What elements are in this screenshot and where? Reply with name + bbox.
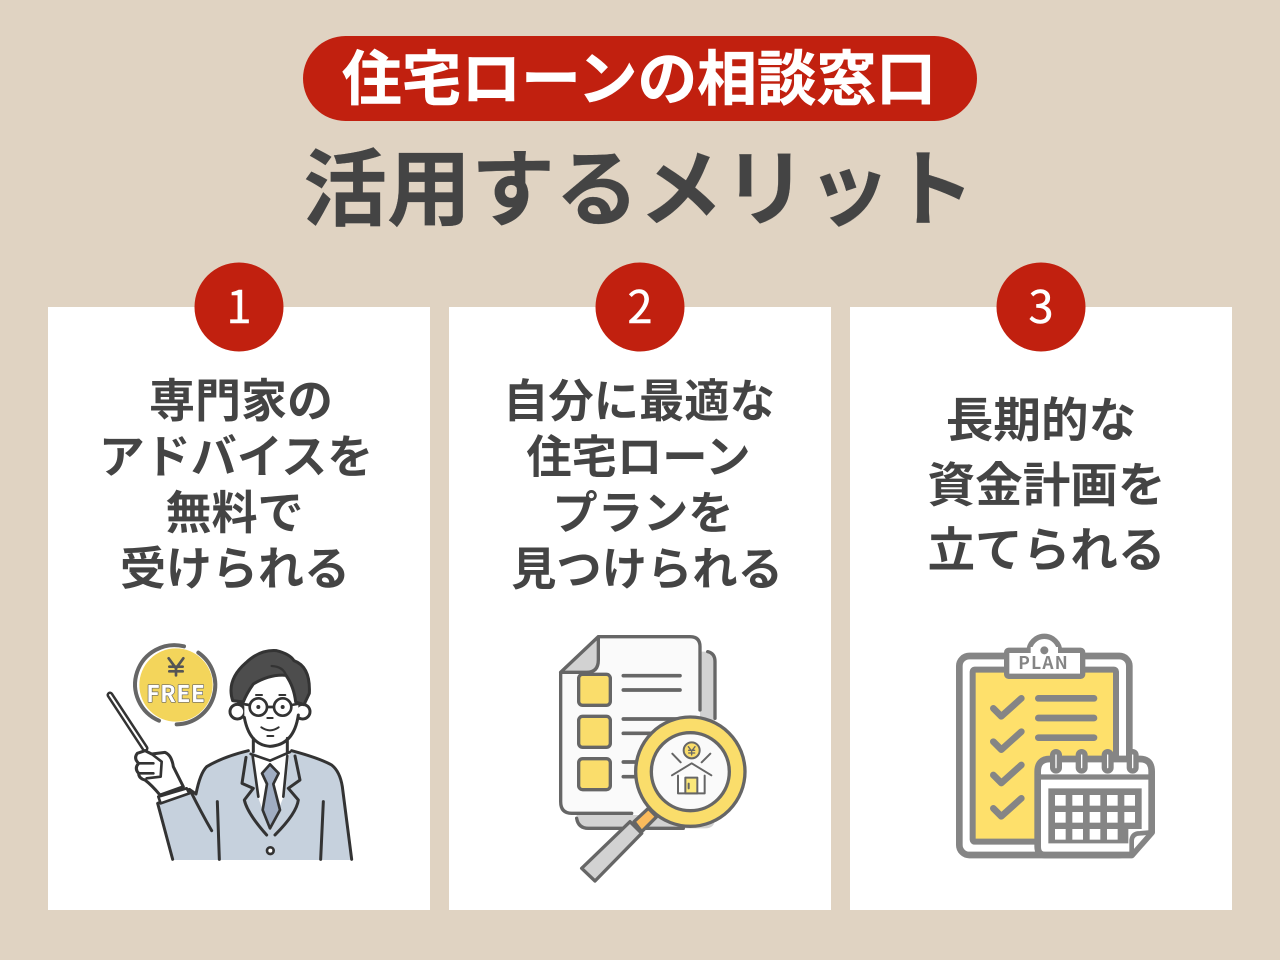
number badge 1 xyxy=(194,262,284,352)
clip with PLAN label xyxy=(1007,636,1083,676)
hand xyxy=(136,751,189,803)
calendar grid cells xyxy=(1055,795,1135,840)
subtitle heading: 活用するメリット xyxy=(303,143,975,237)
text: merit 3 xyxy=(928,395,1165,578)
checklist boxes xyxy=(579,674,610,790)
text: merit 3: 立てられる xyxy=(928,525,1165,578)
jacket xyxy=(158,751,352,860)
number badge 2 xyxy=(596,262,684,352)
shirt xyxy=(252,754,289,830)
number badge 3: 3 xyxy=(1029,271,1053,336)
icon: documents with magnifier xyxy=(561,637,745,881)
text: merit 1: アドバイスを xyxy=(99,431,373,483)
tie xyxy=(262,764,280,828)
calendar page curl xyxy=(1132,832,1152,855)
panel: merit 3 xyxy=(850,262,1232,910)
panel: merit 2 xyxy=(449,262,831,910)
text: merit 1: 無料で xyxy=(166,487,304,539)
checklist lines xyxy=(623,676,680,777)
text: merit 2: 見つけられる xyxy=(511,544,783,595)
text: merit 2: 住宅ローン xyxy=(526,432,751,483)
magnifier lens xyxy=(636,717,745,826)
text: merit 2: 自分に最適な xyxy=(503,376,775,427)
text: merit 3: 資金計画を xyxy=(928,460,1165,513)
head xyxy=(230,651,310,752)
text: merit 2 xyxy=(503,376,783,595)
text: merit 1: 専門家の xyxy=(149,375,333,427)
hair xyxy=(231,651,309,705)
house and yen xyxy=(672,742,711,793)
back page xyxy=(577,652,715,828)
icon: pointer stick xyxy=(110,695,145,748)
calendar xyxy=(1038,752,1152,855)
icon: plan clipboard and calendar xyxy=(959,636,1152,855)
clip with PLAN label: PLAN xyxy=(1018,649,1069,674)
lapels xyxy=(242,756,300,835)
text: merit 1: 受けられる xyxy=(120,543,350,595)
panel: merit 1 xyxy=(48,262,430,910)
title: red pill heading: 住宅ローンの相談窓口 xyxy=(342,46,936,113)
calendar grid xyxy=(1048,788,1142,843)
clipboard xyxy=(959,656,1129,855)
icon: free coin: FREE xyxy=(146,676,206,709)
list lines xyxy=(1038,698,1094,738)
number badge 3 xyxy=(996,262,1086,352)
calendar rings xyxy=(1053,752,1136,771)
text: merit 2: プランを xyxy=(552,488,734,539)
text: merit 1 xyxy=(99,375,373,595)
text: merit 3: 長期的な xyxy=(946,395,1136,448)
front page xyxy=(561,637,700,813)
magnifier handle xyxy=(582,808,657,881)
icon: advisor with free coin xyxy=(110,645,352,860)
check marks xyxy=(993,698,1021,816)
page fold xyxy=(561,637,598,672)
number badge 2: 2 xyxy=(628,271,652,336)
icon: free coin xyxy=(135,645,215,724)
glasses xyxy=(250,698,267,716)
title: red pill heading xyxy=(303,36,977,121)
number badge 1: 1 xyxy=(227,271,251,336)
